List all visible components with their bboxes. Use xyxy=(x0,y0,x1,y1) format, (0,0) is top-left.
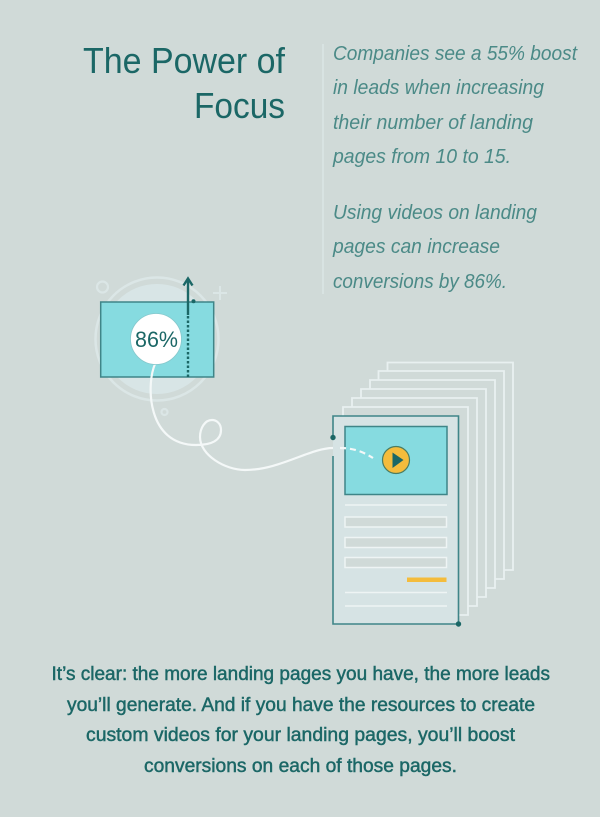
connector curve xyxy=(151,364,340,470)
dashed curve into video xyxy=(340,448,373,458)
title: The Power of xyxy=(83,40,286,81)
stacked pages xyxy=(343,362,513,615)
landing page document xyxy=(330,416,461,627)
text block: landing page statistics: conversions by 86%. xyxy=(333,271,507,293)
closing statement: It’s clear: the more landing pages you have, the more leads xyxy=(52,664,550,685)
icon: 86% conversion chart xyxy=(96,278,227,415)
icon: play button xyxy=(382,446,410,474)
stat badge: 86% xyxy=(130,314,182,364)
text block: landing page statistics: Companies see a 55% boost xyxy=(333,43,578,65)
call to action bar xyxy=(407,578,446,582)
title xyxy=(83,40,286,126)
title: Focus xyxy=(194,85,285,126)
form fields xyxy=(345,505,447,606)
text block: landing page statistics xyxy=(332,43,578,293)
text block: landing page statistics: pages from 10 to 15. xyxy=(332,146,511,168)
closing statement: custom videos for your landing pages, you’ll boost xyxy=(86,725,516,746)
text block: landing page statistics: in leads when increasing xyxy=(333,77,544,99)
text block: landing page statistics: their number of landing xyxy=(333,112,533,134)
closing statement xyxy=(52,664,550,777)
video panel xyxy=(345,426,447,494)
closing statement: you’ll generate. And if you have the resources to create xyxy=(67,695,535,716)
text block: landing page statistics: pages can increase xyxy=(332,236,500,258)
text block: landing page statistics: Using videos on landing xyxy=(333,202,537,224)
closing statement: conversions on each of those pages. xyxy=(144,756,457,777)
stat badge: 86%: 86% xyxy=(135,327,178,352)
